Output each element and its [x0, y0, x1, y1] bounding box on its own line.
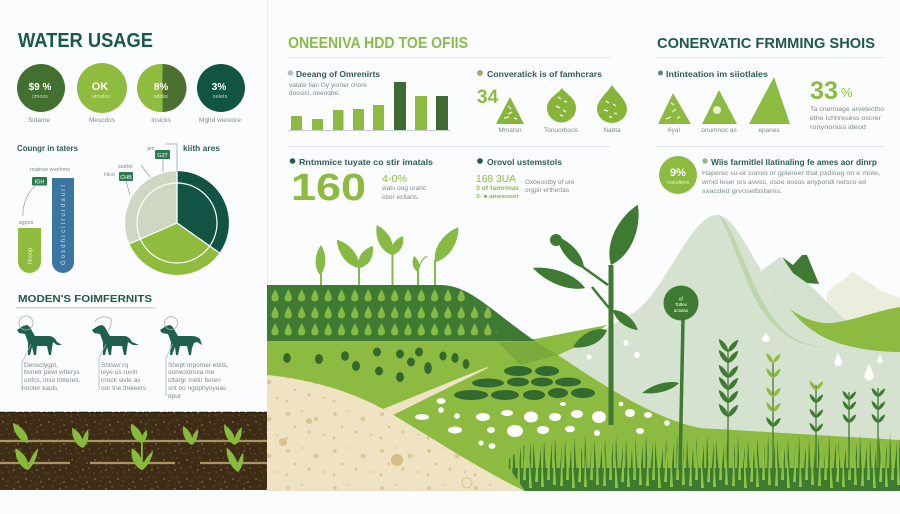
panel: overview — [288, 35, 627, 209]
stat: 160: cbor ecfiaris. — [382, 194, 419, 201]
stat: systems: orgpir erthertas — [525, 187, 570, 194]
stat circle 4: Mghd wieslore — [199, 117, 241, 124]
icon: round drop — [547, 88, 576, 123]
stat circle 3: istcks — [154, 94, 168, 100]
animal 3 — [160, 316, 202, 396]
sand path — [267, 367, 525, 491]
stat: 33%: 33 — [810, 77, 838, 105]
panel: water usage — [17, 30, 245, 276]
text: animal 2: Shtsw/ rq — [101, 362, 128, 369]
stat: 9% callout: Hapenic su-or cornio or gpiereer that pxdisog on e mote, — [702, 170, 880, 177]
text: animal 3: ourwoxtroxa me — [168, 369, 215, 376]
stat: 33%: ethe Ichhresess oscrer — [810, 115, 882, 122]
stat: 9% callout: wmid leser ors avesc, osoe oosos anypondi netsco ed — [701, 179, 866, 186]
pill chart: IGH — [35, 180, 44, 186]
stat: 160: 160 — [291, 167, 366, 209]
stat circle 2: Mescdos — [89, 117, 116, 124]
conservation icons: Tonuorboos — [544, 127, 579, 134]
stat circle 1 — [17, 64, 65, 124]
stat: systems: 3- ■ anwsooer — [476, 194, 520, 200]
flower sign plant: gf — [679, 296, 684, 301]
triangle chart: onumnoc as — [701, 127, 737, 134]
heading: kith ares: kiith ares — [183, 143, 220, 153]
dark hill with crops — [267, 285, 558, 365]
triangle chart — [658, 69, 790, 134]
flower sign plant — [641, 286, 698, 470]
bar chart: doosici, oeenqbe. — [289, 90, 340, 97]
bar chart: vatate tian Oy yonter chore — [289, 82, 367, 89]
triangle chart: epanes — [758, 127, 780, 134]
text: animal 3: snt oo ngophyoyoas — [168, 385, 227, 392]
stat circle 4: oeiets — [213, 94, 228, 100]
bar chart: Deeang of Omrenirts — [296, 69, 380, 79]
stat circle 3: 8% — [154, 82, 168, 93]
stat: 33%: Ta cnerniage arvetectho — [810, 106, 884, 113]
stat: 9% callout: sxacded grvosetbstams. — [702, 188, 782, 195]
stat circle 2: OK — [92, 81, 108, 93]
panel: conservation farming — [656, 35, 884, 195]
stat: systems — [476, 157, 575, 200]
stat circle 4 — [197, 64, 245, 124]
stat: 33% — [810, 77, 884, 131]
stat: 9% callout: Wiis farmitlel llatinaling fe ames aor dinrp — [711, 157, 877, 167]
stat: 9% callout: 9% — [670, 167, 686, 179]
text: animal 3: Shept orpomer ebits, — [168, 362, 229, 369]
conservation icons: Mmatsn — [498, 127, 522, 134]
stat: 160: 4-0% — [382, 174, 407, 185]
stat circle 3: Insicks — [151, 117, 172, 124]
text: animal 3 — [168, 362, 229, 400]
pie chart: G27 — [157, 153, 168, 159]
pie chart: CHB — [120, 175, 132, 181]
stat circle 2 — [77, 63, 127, 124]
stepping stones — [454, 366, 595, 400]
conservation icons: Nabta — [603, 127, 621, 134]
triangle chart: 6yal — [668, 127, 681, 134]
panel: modern's farming — [16, 293, 229, 400]
bar chart — [288, 69, 450, 131]
stat circle 1: $9 % — [29, 82, 52, 93]
sprouts on hill — [315, 222, 464, 285]
animal 1 — [17, 316, 62, 390]
stat: 160 — [290, 157, 433, 209]
stat: 33%: % — [841, 85, 853, 100]
conservation icons — [477, 69, 627, 134]
pie chart: Hico — [104, 172, 115, 178]
water droplets — [586, 333, 882, 380]
pill chart: matrise wvehms — [30, 167, 70, 173]
stat: systems: 3 of famrmus — [476, 186, 520, 192]
stat: 33%: ronynorass ideod — [810, 124, 866, 131]
pill chart: Nroop — [28, 247, 34, 264]
pill chart: ugpus — [18, 220, 34, 226]
text: animal 2: oor tne theleers — [101, 385, 147, 392]
text: animal 1 — [22, 362, 81, 392]
big plant — [530, 201, 647, 425]
title: conservation farming: CONERVATIC FRMMING SHOIS — [657, 35, 875, 52]
stat circle 4: 3% — [212, 82, 226, 93]
title: overview: ONEENIVA HDD TOE OFIIS — [288, 35, 468, 52]
stat circle 3 — [137, 64, 186, 124]
illustration: farm landscape — [267, 201, 900, 492]
heading: modern's: MODEN'S FOIMFERNITS — [18, 293, 152, 305]
stat circle 2: utmdos — [92, 94, 110, 100]
text: animal 3: cttargr metir fenen — [168, 377, 221, 384]
text: animal 1: nooter kiads — [22, 385, 58, 392]
ferns — [717, 338, 886, 470]
stat: 160: Rntmmice tuyate co stir imatals — [299, 157, 433, 167]
conservation icons: 34 — [477, 87, 499, 108]
soil strip with seedlings — [0, 412, 267, 490]
text: animal 2 — [101, 362, 147, 392]
flower sign plant: Totlex — [675, 302, 688, 307]
stat: 9% callout — [659, 156, 880, 195]
pill chart — [18, 167, 74, 273]
text: animal 3: dpur — [168, 393, 182, 400]
mountains — [545, 215, 900, 450]
text: animal 1: Densclygpt, — [24, 362, 58, 369]
stat: systems: Oxbeostby of ure — [525, 179, 575, 186]
stat circle 1: Sidame — [28, 117, 50, 124]
stat: 160: wats oog uraric — [381, 185, 427, 192]
text: animal 2: rnock sivle as — [101, 377, 141, 384]
title: water usage: WATER USAGE — [18, 30, 153, 52]
text: animal 1: bvnetr pewi wtterys — [24, 369, 80, 376]
pie chart: watter — [117, 164, 133, 170]
stat: systems: Orovol ustemstols — [487, 157, 562, 167]
green field — [267, 325, 900, 491]
stat: systems: 168 3UA — [476, 174, 516, 185]
flower sign plant: actulas — [674, 308, 689, 313]
pill chart: Gosdhrcitrurdaurt — [61, 185, 67, 265]
conservation icons: Converatick is of famhcrars — [487, 69, 602, 79]
seeds — [283, 348, 469, 382]
icon: triangle — [496, 97, 524, 124]
animal 2 — [92, 317, 139, 390]
icon: leaf drop — [597, 85, 627, 123]
white pebbles — [415, 398, 670, 449]
text: animal 2: leye us ruvin — [101, 369, 138, 376]
pie chart: am — [147, 146, 155, 152]
pie chart — [104, 144, 230, 276]
stat circle 1: cmoxs — [32, 94, 48, 100]
text: animal 1: unfcs, inso totteres. — [24, 377, 81, 384]
grass — [505, 430, 900, 492]
heading: counter: Coungr in taters — [17, 143, 78, 153]
stat: 9% callout: coculters — [667, 180, 689, 186]
triangle chart: Intinteation im siiotlales — [666, 69, 768, 79]
